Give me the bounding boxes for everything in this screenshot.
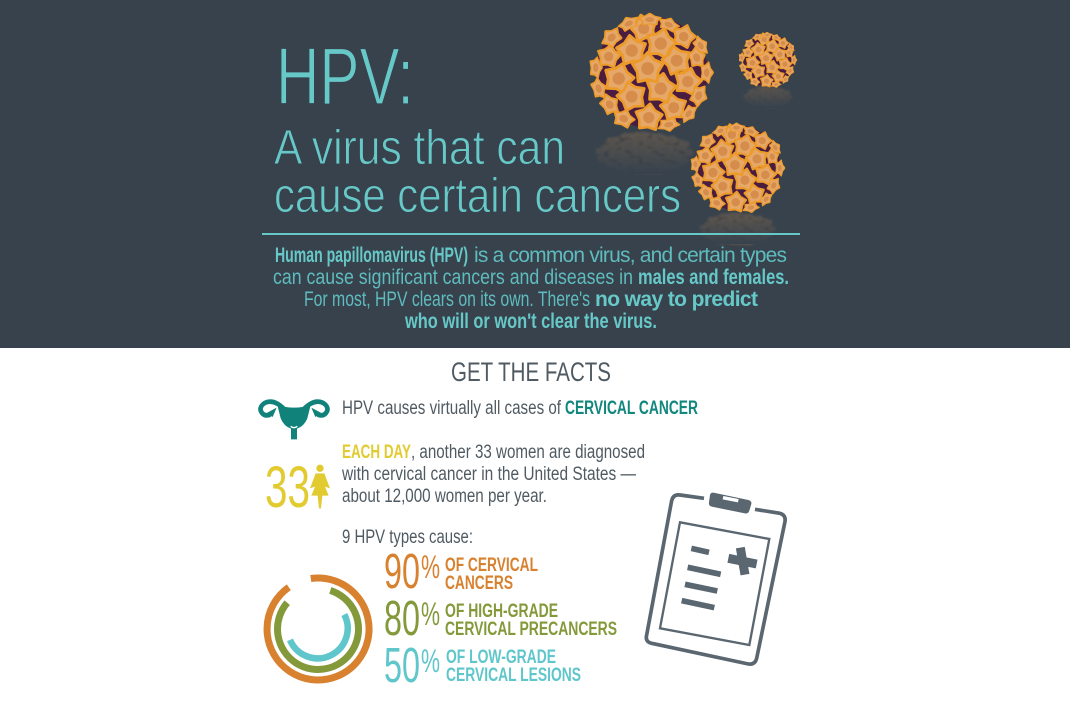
intro text [273, 244, 789, 333]
stat: 50% [384, 639, 581, 693]
stat: 90%: % [421, 549, 440, 585]
label: HPV types: 9 HPV types cause: [342, 527, 473, 548]
stat: 80%: OF HIGH-GRADE [445, 601, 558, 622]
fact: each day: with cervical cancer in the United States — [341, 464, 636, 485]
virus reflections [595, 86, 793, 246]
icon: clipboard [646, 493, 785, 664]
number: 33: 33 [265, 455, 310, 520]
icon: small virus [739, 32, 797, 88]
fact: cervical cancer: HPV causes virtually all cases of [342, 398, 562, 419]
intro text: For most, HPV clears on its own. There's [304, 288, 590, 311]
stat: 80%: 80 [384, 592, 420, 646]
icon: uterus [260, 402, 327, 439]
intro text: can cause significant cancers and diseases in [273, 266, 633, 289]
fact: each day [341, 442, 645, 507]
intro text: males and females. [638, 266, 789, 289]
stat: 80%: % [421, 596, 440, 632]
stat: 50%: OF LOW-GRADE [446, 647, 556, 668]
stat: 50%: % [421, 643, 440, 679]
title: cause certain cancers [274, 169, 681, 223]
fact: cervical cancer: CERVICAL CANCER [565, 398, 698, 419]
heading: get the facts: GET THE FACTS [451, 357, 611, 387]
ring chart [267, 578, 369, 680]
stat: 90%: 90 [384, 545, 420, 599]
icon: large virus [590, 13, 713, 133]
stat: 80%: CERVICAL PRECANCERS [445, 619, 617, 640]
stat: 90%: OF CERVICAL [445, 555, 538, 576]
intro text: who will or won't clear the virus. [404, 310, 657, 333]
intro text: is a common virus, and certain types [474, 244, 787, 267]
title [274, 32, 681, 223]
intro text: Human papillomavirus (HPV) [275, 244, 468, 267]
intro text: no way to predict [595, 288, 758, 311]
stat: 50%: 50 [384, 639, 420, 693]
stat: 80% [384, 592, 617, 646]
fact: each day: about 12,000 women per year. [342, 486, 547, 507]
fact: each day: , another 33 women are diagnosed [411, 442, 645, 463]
icon: medium virus [691, 122, 785, 214]
icon: woman [310, 465, 330, 508]
stat: 90% [384, 545, 538, 599]
header panel [0, 0, 1070, 348]
stat: 90%: CANCERS [445, 573, 513, 594]
fact: each day: EACH DAY [342, 442, 411, 463]
title: A virus that can [274, 121, 565, 175]
stat: 50%: CERVICAL LESIONS [446, 665, 581, 686]
title: HPV: [276, 32, 414, 122]
